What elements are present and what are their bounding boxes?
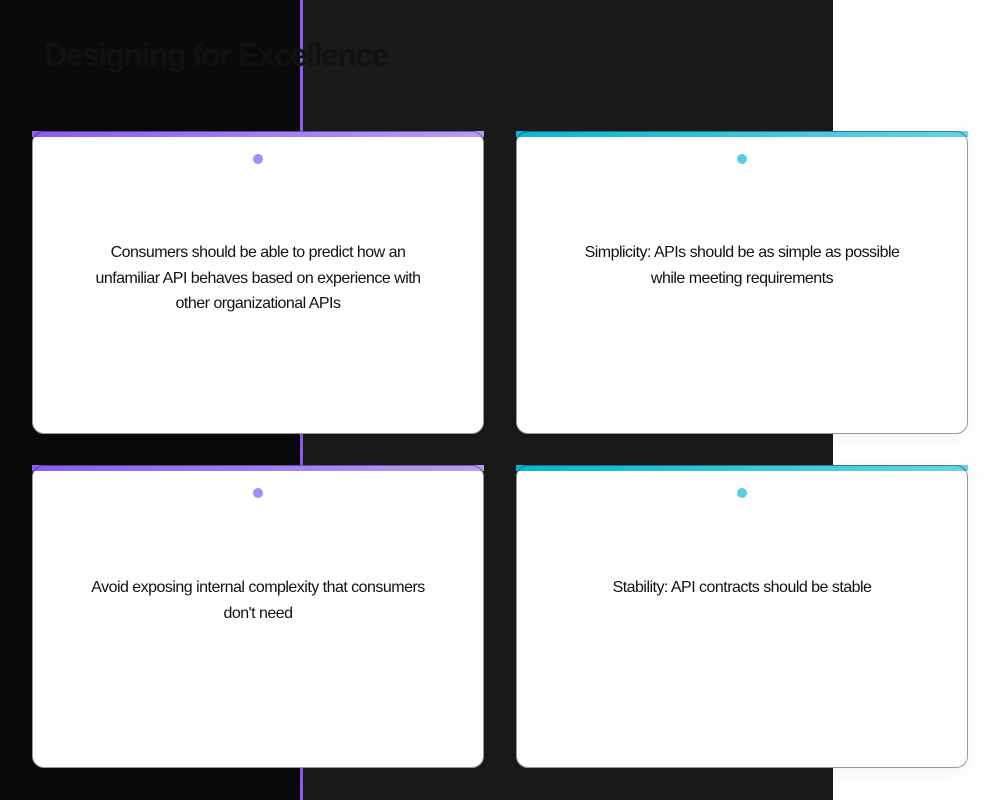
card outline bbox=[516, 131, 968, 434]
title: Designing for Excellence bbox=[44, 37, 388, 73]
dark background right panel bbox=[303, 0, 833, 800]
panel: predictability card bbox=[32, 131, 484, 434]
card dot bbox=[253, 154, 263, 164]
card text: Stability: API contracts should be stable bbox=[613, 579, 871, 596]
panel: complexity card bbox=[32, 465, 484, 768]
card text bbox=[95, 244, 421, 312]
card dot bbox=[737, 154, 747, 164]
card outline bbox=[516, 465, 968, 768]
card outline bbox=[32, 465, 484, 768]
card dot bbox=[253, 488, 263, 498]
card text bbox=[585, 244, 900, 286]
card dot bbox=[737, 488, 747, 498]
panel: simplicity card bbox=[516, 131, 968, 434]
card text: other organizational APIs bbox=[176, 295, 340, 312]
card text bbox=[91, 579, 425, 622]
card accent bar bbox=[516, 131, 968, 137]
card text: don't need bbox=[223, 604, 293, 622]
vertical purple timeline line bbox=[300, 0, 303, 800]
card text: Simplicity: APIs should be as simple as possible bbox=[585, 244, 899, 261]
card accent bar bbox=[516, 465, 968, 471]
card text: Consumers should be able to predict how an bbox=[111, 244, 405, 261]
card accent bar bbox=[32, 131, 484, 137]
dark background left panel bbox=[0, 0, 300, 800]
card text: while meeting requirements bbox=[651, 270, 833, 286]
card accent bar bbox=[32, 465, 484, 471]
panel: stability card bbox=[516, 465, 968, 768]
card outline bbox=[32, 131, 484, 434]
card text: Avoid exposing internal complexity that consumers bbox=[91, 579, 425, 596]
card text: unfamiliar API behaves based on experience with bbox=[95, 270, 421, 286]
